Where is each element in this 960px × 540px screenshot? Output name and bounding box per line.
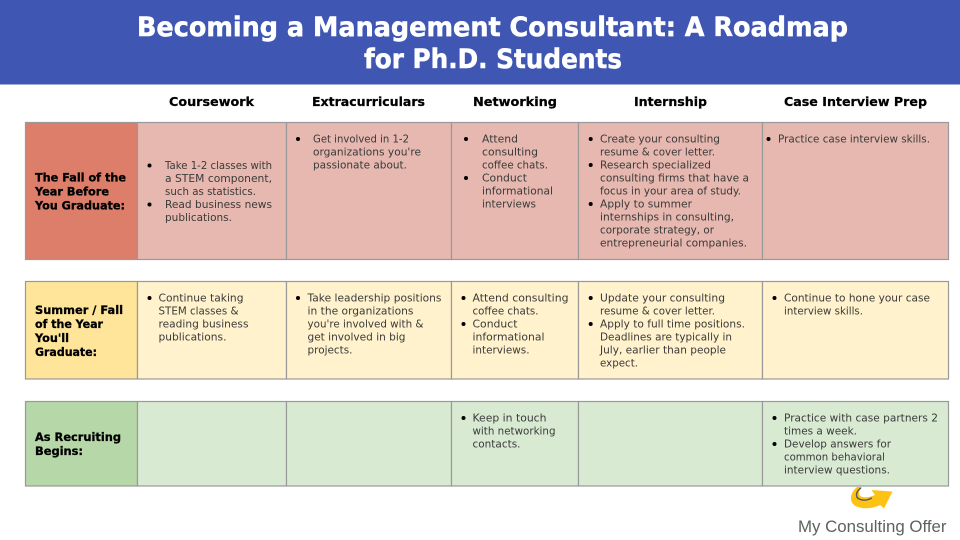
text block: extracurriculars: get involved in big (308, 330, 406, 344)
text block: coursework: Read business news (165, 198, 272, 211)
column headers: Case Interview Prep (784, 95, 927, 109)
text block: internship: resume & cover letter. (600, 304, 715, 318)
text block: networking: consulting (482, 146, 538, 158)
text block: extracurriculars (296, 132, 421, 172)
text block: case interview prep (772, 292, 930, 318)
text block: internship (589, 132, 749, 250)
row label: summer / fall (34, 303, 123, 359)
panel: the fall of the year before you graduate (26, 122, 948, 260)
text block: case interview prep: common behavioral (784, 450, 885, 464)
text block: extracurriculars: organizations you're (313, 146, 421, 158)
text block: coursework: reading business (158, 318, 249, 330)
logo: My Consulting Offer: My Consulting Offer (798, 518, 947, 536)
text block: networking: informational (482, 184, 553, 198)
text block: case interview prep: Continue to hone your case (784, 292, 930, 304)
column headers: Extracurriculars (312, 95, 425, 109)
text block: coursework (148, 292, 249, 344)
title banner: Becoming a Management Consultant: A Roadmap (137, 12, 848, 43)
text block: extracurriculars: you're involved with & (308, 318, 424, 330)
text block: networking: Attend consulting (472, 292, 568, 304)
icon: swoosh arrow (851, 487, 892, 508)
row label: as recruiting begins (35, 430, 121, 458)
text block: case interview prep: interview questions. (784, 464, 890, 476)
text block: networking: contacts. (472, 438, 520, 450)
text block: networking (462, 292, 568, 356)
row label: summer / fall: of the Year (35, 317, 103, 331)
text block: coursework: publications. (158, 330, 226, 344)
text block: extracurriculars: projects. (308, 344, 352, 356)
column headers: Coursework (169, 95, 255, 109)
column headers: Networking (473, 95, 557, 109)
text block: networking (464, 132, 553, 210)
text block: extracurriculars (296, 292, 442, 356)
text block: internship: expect. (600, 356, 638, 370)
text block: internship: Deadlines are typically in (600, 330, 732, 344)
text block: case interview prep: times a week. (784, 424, 857, 438)
text block: networking (462, 412, 556, 450)
text block: extracurriculars: in the organizations (308, 304, 414, 318)
text block: internship: focus in your area of study. (600, 184, 741, 198)
text block: internship: Apply to summer (600, 198, 693, 210)
row label: as recruiting begins: As Recruiting (35, 430, 121, 444)
text block: case interview prep: Practice case interview skills. (778, 132, 930, 146)
panel: as recruiting begins (26, 402, 948, 486)
row label: summer / fall: Summer / Fall (35, 303, 123, 317)
title banner: for Ph.D. Students (364, 44, 622, 75)
column headers: Internship (634, 95, 707, 109)
text block: internship: Update your consulting (600, 292, 725, 304)
text block: internship: Research specialized (600, 158, 711, 172)
text block: networking: Conduct (482, 172, 527, 184)
row label: summer / fall: You'll (34, 331, 69, 345)
row label: fall before: You Graduate: (34, 198, 125, 212)
text block: networking: Attend (482, 132, 518, 146)
text block: coursework (148, 159, 272, 224)
text block: case interview prep (772, 412, 938, 476)
row label: fall before: Year Before (34, 184, 109, 198)
text block: coursework: publications. (165, 211, 232, 224)
text block: networking: Keep in touch (472, 412, 546, 424)
row label: summer / fall: Graduate: (35, 345, 97, 359)
text block: internship: corporate strategy, or (600, 224, 715, 236)
text block: internship: entrepreneurial companies. (600, 236, 747, 250)
logo: My Consulting Offer (798, 487, 947, 536)
row label: fall before (34, 170, 126, 212)
text block: coursework: STEM classes & (158, 304, 239, 318)
column headers (169, 95, 927, 109)
text block: networking: interviews. (472, 344, 530, 356)
row label: fall before: The Fall of the (35, 170, 126, 184)
text block: extracurriculars: Take leadership positions (307, 292, 442, 304)
text block: networking: coffee chats. (482, 158, 548, 172)
text block: networking: interviews (482, 198, 536, 210)
text block: extracurriculars: passionate about. (313, 158, 407, 172)
text block: internship: Create your consulting (600, 132, 720, 146)
text block: coursework: Take 1-2 classes with (164, 159, 272, 172)
text block: internship: Apply to full time positions. (600, 318, 745, 330)
row label: as recruiting begins: Begins: (35, 444, 83, 458)
text block: internship: July, earlier than people (599, 344, 726, 356)
text block: networking: with networking (472, 424, 556, 438)
text block: networking: coffee chats. (472, 304, 538, 318)
text block: coursework: Continue taking (158, 292, 244, 304)
text block: case interview prep: interview skills. (784, 304, 863, 318)
panel: summer / fall of the year you'll graduate (26, 282, 948, 379)
text block: coursework: a STEM component, (165, 172, 272, 185)
text block: internship: consulting firms that have a (600, 172, 749, 184)
text block: extracurriculars: Get involved in 1-2 (313, 132, 409, 146)
text block: internship (589, 292, 745, 370)
text block: coursework: such as statistics. (165, 185, 256, 198)
text block: case interview prep: Practice with case partners 2 (784, 412, 938, 424)
text block: networking: informational (472, 330, 544, 344)
title banner (0, 0, 960, 84)
text block: networking: Conduct (472, 318, 518, 330)
text block: internship: resume & cover letter. (600, 146, 715, 158)
text block: case interview prep: Develop answers for (784, 438, 892, 450)
text block: internship: internships in consulting, (600, 210, 734, 224)
